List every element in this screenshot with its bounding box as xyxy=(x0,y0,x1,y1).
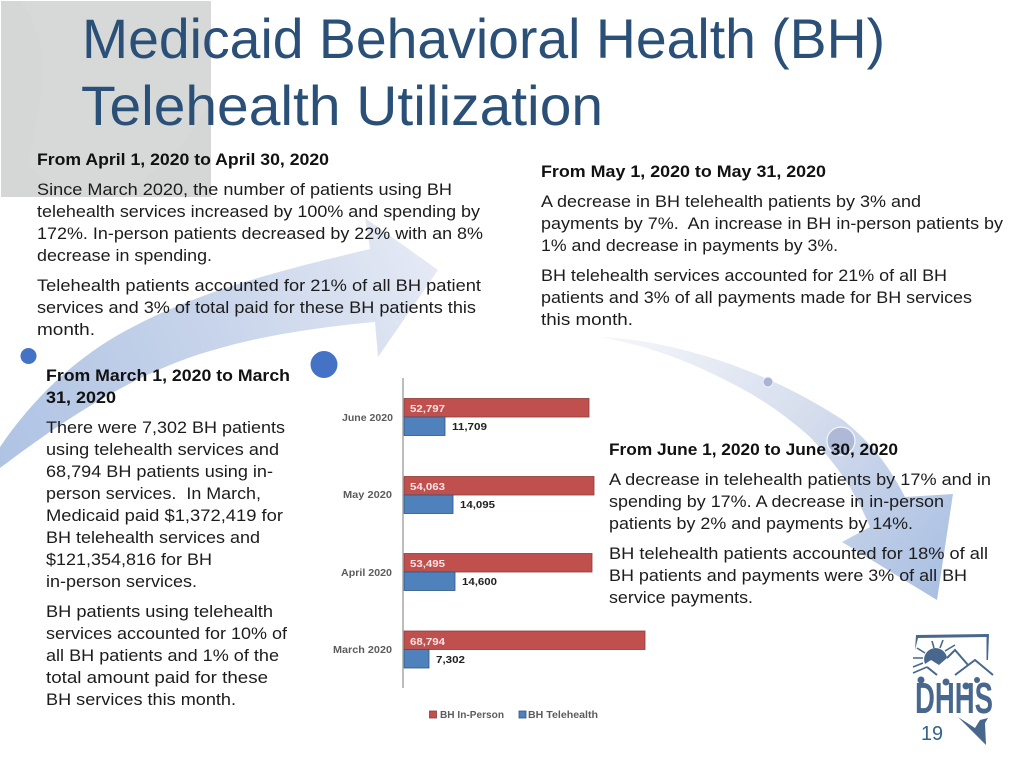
bars: May 2020: 14,095 xyxy=(460,499,495,511)
marker dot: June xyxy=(827,427,855,455)
bars: April 2020: 53,495 xyxy=(410,558,445,570)
text block: March 2020: There were 7,302 BH patients xyxy=(46,418,285,437)
text block: March 2020: BH telehealth services and xyxy=(46,528,260,547)
text block: March 2020: total amount paid for these xyxy=(46,668,268,687)
bars: March 2020: 68,794 xyxy=(410,636,445,648)
text block: June 2020: BH telehealth patients accounted for 18% of all xyxy=(609,544,988,563)
text block: June 2020: spending by 17%. A decrease in in-person xyxy=(609,492,944,511)
state outline top xyxy=(915,634,989,660)
text block: April 2020: decrease in spending. xyxy=(37,246,212,265)
text block: April 2020: 172%. In-person patients decreased by 22% with an 8% xyxy=(37,224,483,243)
text block: June 2020: BH patients and payments were 3% of all BH xyxy=(609,566,967,585)
text block: April 2020: month. xyxy=(37,320,95,339)
text block: May 2020: A decrease in BH telehealth patients by 3% and xyxy=(541,192,921,211)
bars: April 2020: 14,600 xyxy=(462,576,497,588)
text block: April 2020: Telehealth patients accounted for 21% of all BH patient xyxy=(37,276,481,295)
bars: March 2020: March 2020 xyxy=(333,644,392,656)
bar chart: BH in-person vs telehealth patients xyxy=(333,378,645,721)
bars: March 2020 xyxy=(333,631,645,668)
chart legend: BH In-Person xyxy=(440,709,504,721)
bars: May 2020 xyxy=(343,476,594,514)
title xyxy=(81,7,885,137)
text block: April 2020 xyxy=(37,150,483,339)
text block: March 2020: 68,794 BH patients using in- xyxy=(46,462,273,481)
marker dot: April xyxy=(310,351,338,378)
mountains xyxy=(927,650,993,675)
text block: June 2020: patients by 2% and payments by 14%. xyxy=(609,514,913,533)
figure heads xyxy=(918,676,924,684)
text block: March 2020: BH patients using telehealth xyxy=(46,602,273,621)
bars: June 2020 xyxy=(342,398,589,436)
text block: April 2020: From April 1, 2020 to April 30, 2020 xyxy=(37,150,329,169)
title: Telehealth Utilization xyxy=(81,74,603,137)
chart axis xyxy=(402,378,404,688)
sun xyxy=(924,648,947,665)
page number: 19 xyxy=(921,723,943,745)
text block: April 2020: telehealth services increased by 100% and spending by xyxy=(37,202,481,221)
marker dot: March xyxy=(20,348,36,364)
text block: June 2020 xyxy=(609,440,991,607)
text block: June 2020: service payments. xyxy=(609,588,753,607)
text block: March 2020: 31, 2020 xyxy=(46,388,116,407)
text block: May 2020: patients and 3% of all payments made for BH services xyxy=(541,288,972,307)
text block: April 2020: services and 3% of total paid for these BH patients this xyxy=(37,298,476,317)
grey corner panel xyxy=(1,1,211,197)
text block: May 2020: 1% and decrease in payments by 3%. xyxy=(541,236,838,255)
bars: June 2020: 52,797 xyxy=(410,403,445,415)
sun rays xyxy=(913,640,955,673)
text block: June 2020: A decrease in telehealth patients by 17% and in xyxy=(609,470,991,489)
bars: June 2020: June 2020 xyxy=(342,412,393,424)
state outline bottom xyxy=(958,717,988,745)
text block: March 2020: services accounted for 10% of xyxy=(46,624,287,643)
text block: March 2020: person services. In March, xyxy=(46,484,261,503)
bars: May 2020: 54,063 xyxy=(410,481,445,493)
text block: April 2020: Since March 2020, the number of patients using BH xyxy=(37,180,452,199)
marker dot: May xyxy=(763,377,773,387)
text block: March 2020: Medicaid paid $1,372,419 for xyxy=(46,506,283,525)
icon: DHHS Nevada logo xyxy=(913,634,993,745)
text block: May 2020: From May 1, 2020 to May 31, 2020 xyxy=(541,162,826,181)
text block: March 2020: $121,354,816 for BH xyxy=(46,550,212,569)
bars: May 2020: May 2020 xyxy=(343,489,392,501)
text block: March 2020 xyxy=(46,366,290,709)
text block: June 2020: From June 1, 2020 to June 30, 2020 xyxy=(609,440,898,459)
bars: April 2020: April 2020 xyxy=(341,567,392,579)
arrow: rising curve from March to April xyxy=(0,218,438,468)
text block: March 2020: From March 1, 2020 to March xyxy=(46,366,290,385)
text block: May 2020: payments by 7%. An increase in BH in-person patients by xyxy=(541,214,1004,233)
bars: March 2020: 7,302 xyxy=(436,654,465,666)
text block: May 2020: BH telehealth services accounted for 21% of all BH xyxy=(541,266,947,285)
title: Medicaid Behavioral Health (BH) xyxy=(82,7,885,70)
text block: March 2020: using telehealth services and xyxy=(46,440,279,459)
text block: May 2020 xyxy=(541,162,1004,329)
text block: May 2020: this month. xyxy=(541,310,633,329)
text block: March 2020: all BH patients and 1% of the xyxy=(46,646,279,665)
chart legend xyxy=(430,709,598,721)
arrow: descending curve from May to June xyxy=(600,337,953,600)
chart legend: BH Telehealth xyxy=(528,709,598,721)
bars: April 2020 xyxy=(341,554,592,590)
text block: March 2020: BH services this month. xyxy=(46,690,236,709)
bars: June 2020: 11,709 xyxy=(452,421,487,433)
text block: March 2020: in-person services. xyxy=(46,572,197,591)
